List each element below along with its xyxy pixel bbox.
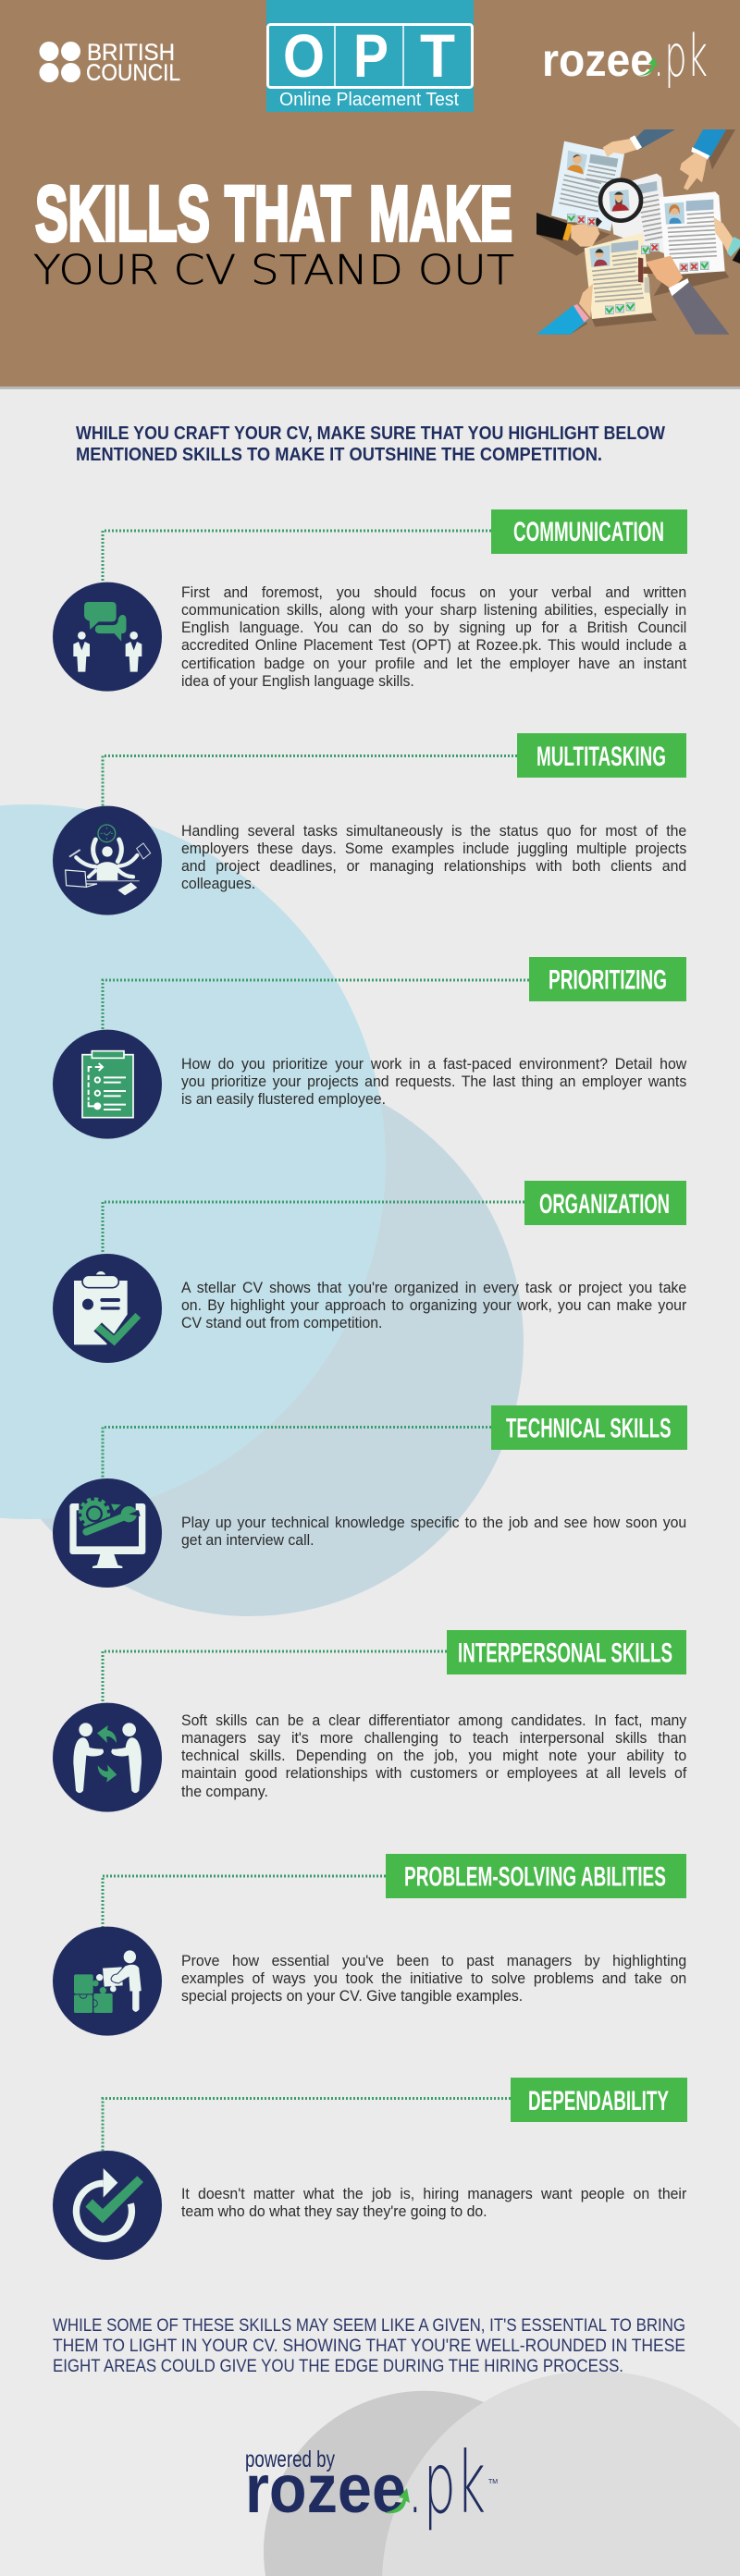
- intro heading: [76, 423, 666, 465]
- logo: OPT Online Placement Test: O: [283, 21, 325, 90]
- text: multitasking: employers these days. Some examples include juggling multiple projects: [181, 840, 686, 857]
- text: interpersonal skills: maintain good relationships with customers or employees at all levels of: [181, 1765, 686, 1782]
- icon: checked clipboard: [53, 1254, 162, 1363]
- text: prioritizing: [181, 1056, 686, 1108]
- panel: multitasking: [53, 733, 686, 915]
- heading: dependability: [511, 2078, 687, 2122]
- header banner: [0, 0, 740, 389]
- logo: OPT Online Placement Test: P: [353, 21, 388, 90]
- icon: two people talking: [53, 583, 162, 692]
- text: prioritizing: is an easily flustered employee.: [181, 1091, 386, 1108]
- heading: prioritizing: PRIORITIZING: [549, 965, 667, 995]
- text: dependability: [181, 2186, 686, 2220]
- footer logo: powered by rozee.pk: [245, 2441, 498, 2533]
- footer logo: powered by rozee.pk: rozee: [245, 2450, 406, 2527]
- panel: technical skills: [53, 1405, 687, 1588]
- text: prioritizing: How do you prioritize your work in a fast-paced environment? Detail how: [181, 1056, 686, 1073]
- text: technical skills: get an interview call.: [181, 1532, 314, 1549]
- doc 1: [551, 141, 624, 231]
- text: problem-solving abilities: Prove how essential you've been to past managers by highlighting: [181, 1953, 686, 1969]
- text: technical skills: Play up your technical knowledge specific to the job and see how soon you: [181, 1515, 686, 1531]
- logo: OPT Online Placement Test: Online Placement Test: [279, 90, 459, 110]
- text: communication: communication skills, along with your sharp listening abilities, especially in: [181, 602, 686, 619]
- logo: British Council: [39, 40, 180, 86]
- top hand: [603, 139, 637, 157]
- logo: British Council: BRITISH: [87, 40, 175, 66]
- magnifier: [578, 219, 599, 244]
- text: technical skills: [181, 1515, 686, 1549]
- left hand with sleeve: [536, 213, 567, 240]
- text: organization: A stellar CV shows that you're organized in every task or project you take: [181, 1280, 686, 1296]
- text: interpersonal skills: the company.: [181, 1783, 268, 1799]
- footer logo: powered by rozee.pk: TM: [488, 2479, 498, 2485]
- check marks: [567, 215, 709, 314]
- text: prioritizing: you prioritize your projects and requests. The last thing an employer wants: [181, 1073, 686, 1090]
- heading: problem-solving abilities: [386, 1854, 686, 1898]
- doc 4: [585, 233, 652, 319]
- icon: monitor with gear and wrench: [53, 1478, 162, 1588]
- icon: multitasking person: [53, 806, 162, 915]
- title: YOUR CV STAND OUT: [33, 247, 514, 294]
- illustration: hands reviewing CVs: [536, 129, 740, 335]
- title: THAT: [225, 170, 351, 257]
- icon: priority clipboard: [53, 1030, 162, 1139]
- text: interpersonal skills: [181, 1712, 686, 1799]
- doc 3: [659, 191, 725, 276]
- text: communication: First and foremost, you should focus on your verbal and written: [181, 584, 686, 601]
- panel: organization: [53, 1181, 686, 1363]
- text: problem-solving abilities: special projects on your CV. Give tangible examples.: [181, 1988, 523, 2005]
- panel: dependability: [53, 2078, 687, 2260]
- text: organization: on. By highlight your approach to organizing your work, you can make your: [181, 1297, 686, 1314]
- text: communication: [181, 584, 686, 690]
- heading: multitasking: MULTITASKING: [536, 742, 666, 772]
- intro heading: WHILE YOU CRAFT YOUR CV, MAKE SURE THAT YOU HIGHLIGHT BELOW: [76, 423, 666, 444]
- icon: person fitting puzzle: [53, 1927, 162, 2036]
- logo: rozee.pk white: rozee: [542, 34, 654, 86]
- panel: prioritizing: [53, 957, 686, 1139]
- heading: communication: [491, 509, 687, 554]
- text: multitasking: colleagues.: [181, 876, 255, 892]
- text: interpersonal skills: managers say it's more challenging to teach interpersonal skills than: [181, 1730, 686, 1747]
- logo: OPT Online Placement Test: T: [420, 21, 455, 90]
- panel: problem-solving abilities: [53, 1854, 686, 2036]
- text: interpersonal skills: technical skills. Depending on the job, you might note your ability to: [181, 1748, 686, 1764]
- text: problem-solving abilities: [181, 1953, 686, 2005]
- doc 2: [608, 174, 671, 256]
- title: SKILLS: [35, 170, 210, 257]
- closing statement: EIGHT AREAS COULD GIVE YOU THE EDGE DURING THE HIRING PROCESS.: [53, 2357, 623, 2376]
- text: dependability: team who do what they say they're going to do.: [181, 2203, 487, 2220]
- text: interpersonal skills: Soft skills can be a clear differentiator among candidates. In fact, many: [181, 1712, 686, 1729]
- heading: organization: [524, 1181, 686, 1225]
- text: organization: [181, 1280, 686, 1331]
- heading: multitasking: [517, 733, 686, 778]
- top sleeve: [634, 129, 675, 150]
- heading: interpersonal skills: [447, 1630, 686, 1674]
- panel: communication: [53, 509, 687, 692]
- logo: OPT Online Placement Test: [266, 0, 474, 112]
- footer logo: powered by rozee.pk: powered by: [245, 2447, 335, 2472]
- closing statement: THEM TO LIGHT IN YOUR CV. SHOWING THAT YOU'RE WELL-ROUNDED IN THESE: [53, 2337, 685, 2356]
- title: MAKE: [369, 170, 512, 257]
- panel: interpersonal skills: [53, 1630, 686, 1812]
- heading: technical skills: [491, 1405, 687, 1450]
- right hand: [714, 217, 734, 255]
- logo: British Council: COUNCIL: [86, 60, 180, 86]
- icon: circular arrow with check: [53, 2151, 162, 2260]
- text: communication: idea of your English language skills.: [181, 673, 414, 690]
- closing statement: [53, 2316, 685, 2376]
- text: dependability: It doesn't matter what the job is, hiring managers want people on their: [181, 2186, 686, 2202]
- top-right hand: [692, 129, 726, 159]
- logo: rozee.pk white: [542, 22, 708, 90]
- text: problem-solving abilities: examples of ways you took the initiative to solve problems and take on: [181, 1970, 686, 1987]
- text: organization: CV stand out from competition.: [181, 1315, 382, 1331]
- text: communication: accredited Online Placement Test (OPT) at Rozee.pk. This would include a: [181, 637, 686, 654]
- text: communication: certification badge on your profile and let the employer have an instant: [181, 655, 686, 671]
- lower-left hand: [536, 305, 587, 335]
- text: communication: English language. You can do so by signing up for a British Council: [181, 619, 686, 636]
- logo: rozee.pk white: .pk: [653, 22, 708, 90]
- icon: two people exchanging: [53, 1703, 162, 1812]
- intro heading: MENTIONED SKILLS TO MAKE IT OUTSHINE THE COMPETITION.: [76, 444, 602, 465]
- text: multitasking: [181, 823, 686, 892]
- stamp hand: [638, 257, 643, 283]
- text: multitasking: and project deadlines, or managing relationships with both clients and: [181, 858, 686, 875]
- heading: prioritizing: [529, 957, 686, 1001]
- text: multitasking: Handling several tasks simultaneously is the status quo for most of the: [181, 823, 686, 840]
- title: [33, 170, 514, 294]
